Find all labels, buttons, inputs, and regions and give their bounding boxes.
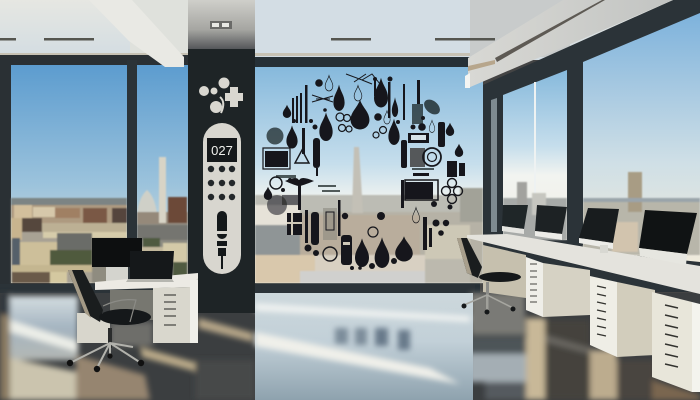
- desk knee wall: [483, 245, 526, 298]
- laptop: [126, 251, 174, 282]
- soffit: right ceiling duct: [465, 0, 673, 88]
- drawer unit 2: [590, 276, 655, 357]
- medical icon arch mural: [263, 74, 465, 270]
- device display: [207, 138, 237, 162]
- icons: large drops: [264, 78, 463, 268]
- ceiling: [0, 0, 700, 60]
- ceiling spotlight: [210, 21, 232, 29]
- left office chair: [67, 270, 151, 372]
- icon: scribble molecule: [312, 74, 380, 102]
- window panes: right: [483, 0, 700, 292]
- right desk run: [467, 205, 700, 392]
- floor: [0, 293, 700, 400]
- window pane: center: [255, 57, 483, 293]
- drawer unit 3: [652, 292, 700, 392]
- desk surface: [467, 234, 700, 294]
- city skyline: right panes: [503, 172, 700, 255]
- icons: round patches: [266, 97, 462, 261]
- recessed ceiling fixtures: [0, 38, 495, 40]
- icon group: molecules and cross on pillar: [199, 78, 243, 113]
- icons: outlined drops: [325, 76, 435, 223]
- city skyline: second pane with capitol and monument: [137, 157, 188, 283]
- drawer unit 1: [526, 257, 590, 317]
- icons: screens and devices: [263, 133, 465, 240]
- floor reflection: center window: [255, 293, 473, 400]
- device keypad buttons: [208, 166, 235, 200]
- left desk: [77, 238, 198, 343]
- city skyline: center pane with monument: [255, 147, 483, 283]
- monitors: [502, 205, 697, 265]
- beam: diagonal ceiling left: [89, 0, 184, 67]
- left drawer pedestal: [77, 313, 110, 343]
- device syringe icon: [216, 211, 228, 269]
- desktop monitor: [92, 238, 142, 281]
- icons: small dots: [281, 76, 452, 270]
- icon: caduceus: [285, 178, 314, 210]
- desk top: [95, 273, 198, 290]
- device display: 027: [211, 143, 233, 158]
- device panel on pillar: [203, 123, 241, 274]
- city skyline: left: [11, 198, 127, 283]
- window mullions: [0, 60, 583, 293]
- right drawer pedestal: [153, 278, 198, 343]
- right office chair: [457, 238, 521, 314]
- window panes: left: [0, 55, 188, 293]
- icons: vials and bottles: [292, 80, 445, 265]
- pillar: [188, 49, 255, 313]
